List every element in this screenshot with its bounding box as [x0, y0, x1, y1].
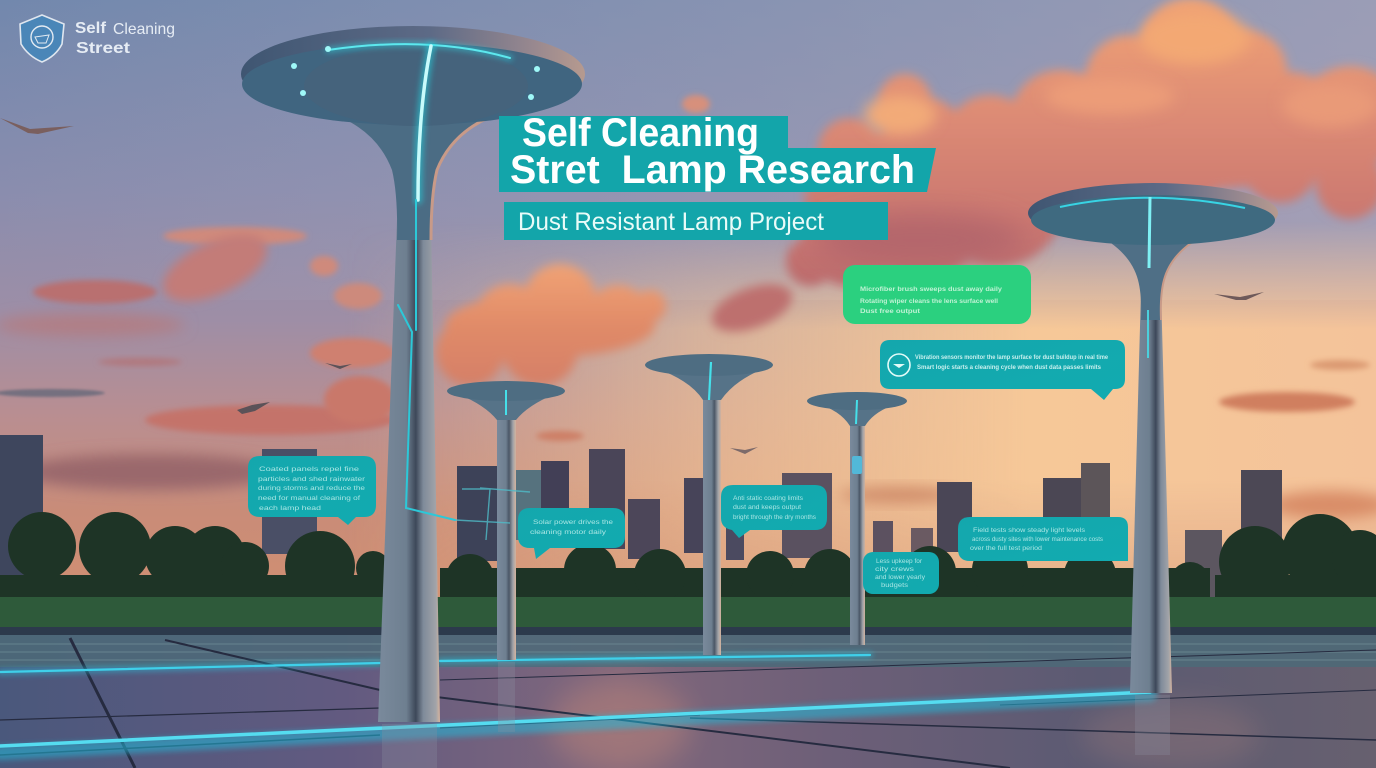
logo: [20, 15, 175, 62]
callout: left: particles and shed rainwater: [258, 476, 366, 483]
logo text: Self: [75, 20, 107, 37]
callout: left: during storms and reduce the: [258, 485, 365, 492]
lamp: far lamp 3: [645, 354, 773, 655]
logo text: [75, 20, 175, 57]
callout: lower center: [863, 552, 939, 594]
city skyline: [0, 435, 1282, 600]
dark curb: [0, 627, 1376, 636]
callout: green: Dust free output: [860, 308, 921, 315]
reflective solar pavement: [0, 635, 1376, 768]
callout: lower center: budgets: [881, 583, 908, 589]
pole reflections: [382, 662, 1170, 768]
glowing light strips: [328, 44, 510, 520]
title background: [499, 116, 936, 192]
lamp: foreground large lamp: [241, 26, 585, 722]
birds: [0, 118, 1264, 454]
callout: teal with icon: Smart logic starts a cleaning cycle when dust data passes limits: [917, 364, 1101, 371]
mid and left sunset clouds: [0, 221, 1376, 519]
title text: Stret Lamp Research: [510, 148, 915, 192]
large sunset cloud, upper right: [682, 0, 1376, 341]
callout: left: each lamp head: [259, 505, 322, 512]
callout: lower right: across dusty sites with lower maintenance costs: [972, 536, 1104, 543]
icon: bird in circle: [888, 354, 910, 376]
callout: left: [248, 456, 376, 525]
grass band: [0, 597, 1376, 629]
callout: center: dust and keeps output: [733, 504, 801, 511]
title block: [499, 111, 936, 192]
callout: lower center: and lower yearly: [875, 575, 925, 581]
callout: lower right: [958, 517, 1128, 561]
callout: lower center: city crews: [875, 567, 914, 573]
logo text: Cleaning: [113, 21, 175, 38]
callout: left: need for manual cleaning of: [258, 495, 360, 502]
callout: green: Microfiber brush sweeps dust away daily: [860, 286, 1002, 293]
callout: teal with icon: Vibration sensors monitor the lamp surface for dust buildup in real time: [915, 354, 1108, 361]
callout: center: Anti static coating limits: [733, 495, 804, 502]
callout: center: [721, 485, 827, 538]
callout: teal with icon: [880, 340, 1125, 400]
callout: center left: Solar power drives the: [533, 519, 613, 526]
lamp: far lamp 2: [447, 381, 565, 660]
circuit light lines between lamps: [455, 488, 530, 540]
LED dots: [291, 46, 540, 100]
callout: center left: cleaning motor daily: [530, 529, 607, 536]
callout: left: Coated panels repel fine: [259, 466, 360, 473]
icon: shield: [20, 15, 64, 62]
callout: green: Rotating wiper cleans the lens surface well: [860, 298, 998, 305]
subtitle: [504, 202, 888, 240]
glowing ground lines: [0, 655, 1150, 753]
callout: center: bright through the dry months: [733, 514, 817, 521]
tree line: [0, 512, 1376, 602]
subtitle: Dust Resistant Lamp Project: [518, 208, 824, 236]
title text: Self Cleaning: [522, 111, 759, 155]
logo text: Street: [76, 40, 131, 57]
lamp: far lamp 4: [807, 392, 907, 645]
callout: lower center: Less upkeep for: [876, 559, 922, 565]
callout: lower right: over the full test period: [970, 545, 1042, 552]
callout: center left: [518, 508, 625, 559]
callout: lower right: Field tests show steady light levels: [973, 527, 1086, 534]
callout: green: [843, 265, 1031, 324]
title text: [510, 111, 915, 192]
lamp: right large lamp: [1028, 183, 1278, 693]
